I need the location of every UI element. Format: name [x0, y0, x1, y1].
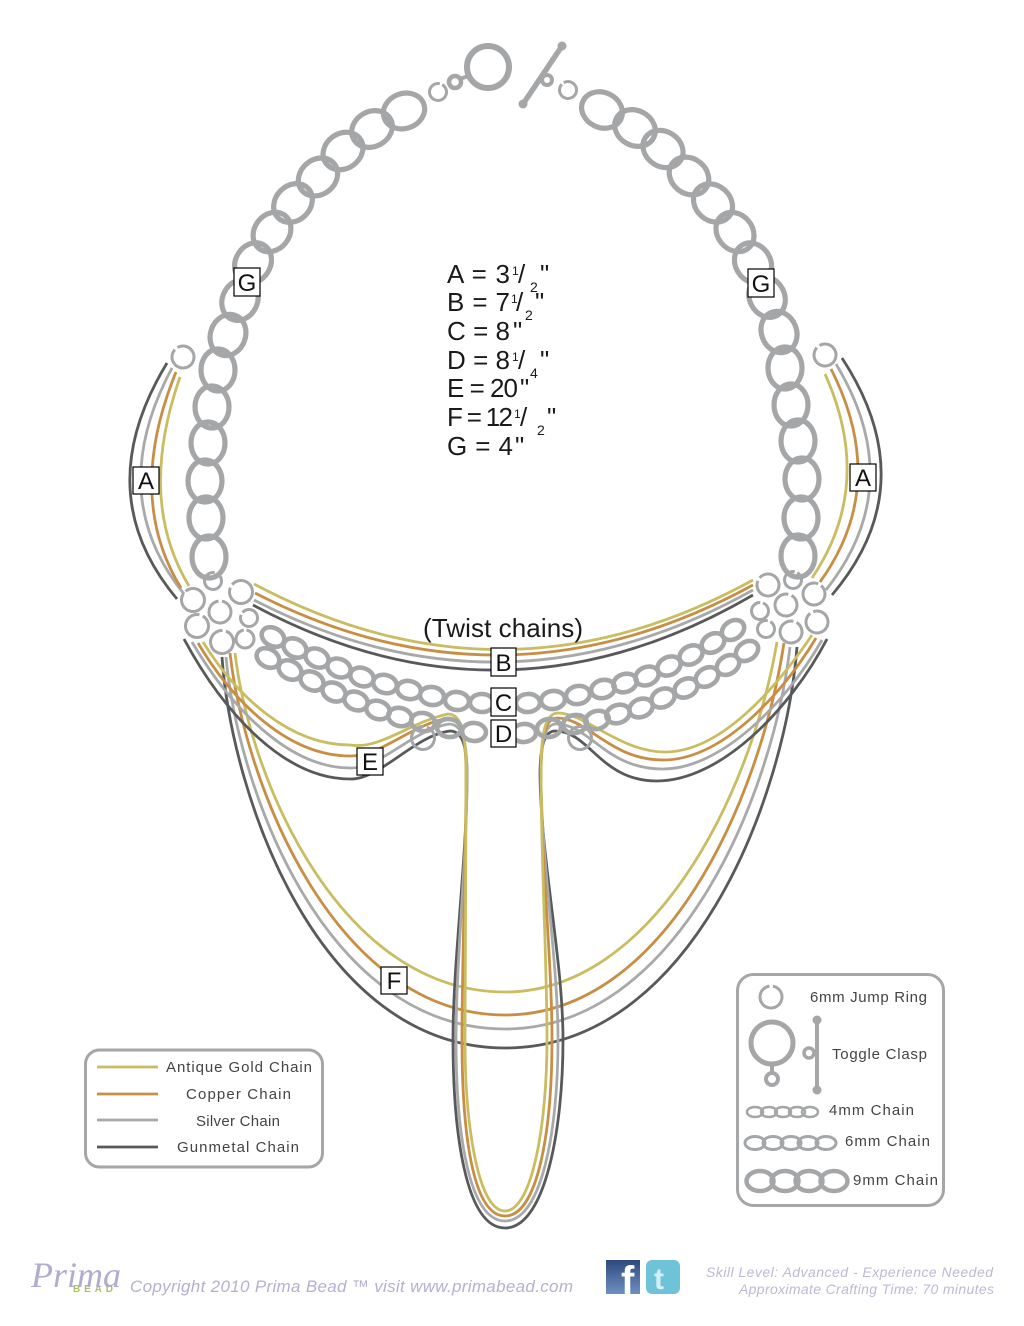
measurements list: E = 20	[447, 373, 518, 403]
measurements list: 1	[511, 292, 518, 306]
jump ring cluster left	[177, 569, 261, 657]
label D	[491, 720, 516, 748]
label G left	[234, 268, 260, 297]
key: jump ring: 6mm Jump Ring	[810, 989, 927, 1006]
measurements list: "	[540, 345, 549, 375]
jump ring cluster right	[749, 568, 831, 647]
key: 6mm chain: 6mm Chain	[845, 1133, 930, 1150]
measurements list: G = 4	[447, 431, 513, 461]
label G right: G	[752, 271, 770, 298]
label C: C	[495, 690, 512, 717]
icon: facebook: f	[621, 1259, 635, 1303]
measurements list: /	[516, 287, 524, 317]
measurements list: "	[513, 316, 522, 346]
chain E: swags and central loop	[184, 635, 827, 1228]
copyright line: Copyright 2010 Prima Bead ™ visit www.primabead.com	[130, 1277, 573, 1296]
key: 9mm chain: 9mm Chain	[853, 1172, 938, 1189]
toggle clasp bar	[518, 42, 566, 108]
measurements list: 2	[525, 307, 533, 323]
key: 4mm chain: 4mm Chain	[829, 1102, 914, 1119]
label C	[491, 688, 516, 717]
label G left: G	[238, 270, 256, 297]
jump rings at clasp and chain tops	[168, 78, 840, 372]
chain G right: 9mm links	[576, 85, 819, 577]
label D: D	[495, 721, 512, 748]
chain A left	[130, 363, 189, 599]
label B	[491, 648, 516, 677]
measurements list: 1	[512, 264, 519, 278]
chain B: twisted strands	[253, 580, 753, 670]
icon: facebook	[606, 1259, 640, 1303]
label F: F	[387, 968, 401, 995]
toggle clasp ring	[449, 46, 509, 88]
label A right	[850, 464, 876, 492]
label A left	[133, 467, 159, 495]
logo: Prima Bead: BEAD	[73, 1284, 113, 1295]
logo: Prima Bead: Prima	[30, 1255, 121, 1295]
measurements list: 2	[530, 279, 538, 295]
crafting time text: Approximate Crafting Time: 70 minutes	[738, 1281, 994, 1297]
key: jump ring	[758, 984, 927, 1010]
label A left: A	[138, 468, 154, 495]
measurements list: "	[515, 431, 524, 461]
label A right: A	[855, 465, 871, 492]
measurements list: "	[547, 402, 556, 432]
key: 9mm chain	[746, 1171, 938, 1191]
key: toggle clasp	[751, 1016, 927, 1094]
legend: copper chain: Copper Chain	[186, 1086, 291, 1103]
chain F: long lower drape	[222, 642, 797, 1048]
label E	[357, 748, 383, 776]
icon: twitter	[646, 1260, 680, 1296]
measurements list: /	[518, 345, 526, 375]
measurements list: D = 8	[447, 345, 510, 375]
chain D: 6mm chain lower row	[253, 637, 762, 743]
measurements list: "	[520, 373, 529, 403]
label B: B	[495, 650, 512, 677]
measurements list: F = 12	[447, 402, 513, 432]
legend: gunmetal chain: Gunmetal Chain	[177, 1139, 299, 1156]
panel: parts key	[738, 974, 944, 1206]
key: 6mm chain	[745, 1133, 930, 1150]
measurements list: /	[518, 259, 526, 289]
skill level text: Skill Level: Advanced - Experience Needed	[706, 1264, 994, 1280]
measurements list: 4	[530, 365, 538, 381]
measurements list: "	[540, 259, 549, 289]
jump rings joining chain E to chain D	[408, 722, 596, 754]
measurements list: 1	[514, 407, 521, 421]
legend: antique gold chain: Antique Gold Chain	[166, 1059, 312, 1076]
measurements list: A = 3	[447, 259, 510, 289]
measurements list	[447, 259, 556, 461]
measurements list: C = 8	[447, 316, 510, 346]
measurements list: 1	[512, 350, 519, 364]
measurements list: "	[535, 287, 544, 317]
label F	[381, 967, 407, 995]
heading: twist chains: (Twist chains)	[423, 613, 583, 643]
label E: E	[362, 749, 378, 776]
legend: silver chain: Silver Chain	[196, 1113, 280, 1130]
key: 4mm chain	[747, 1102, 914, 1119]
chain C: 6mm chain upper row	[258, 616, 748, 713]
measurements list: 2	[537, 422, 545, 438]
chain A right	[812, 358, 881, 595]
panel: chain colour legend	[86, 1050, 322, 1167]
chain G left: 9mm links	[188, 87, 430, 578]
key: toggle clasp: Toggle Clasp	[832, 1046, 927, 1063]
measurements list: /	[520, 402, 528, 432]
icon: twitter: t	[654, 1263, 664, 1296]
label G right	[748, 269, 774, 298]
measurements list: B = 7	[447, 287, 510, 317]
